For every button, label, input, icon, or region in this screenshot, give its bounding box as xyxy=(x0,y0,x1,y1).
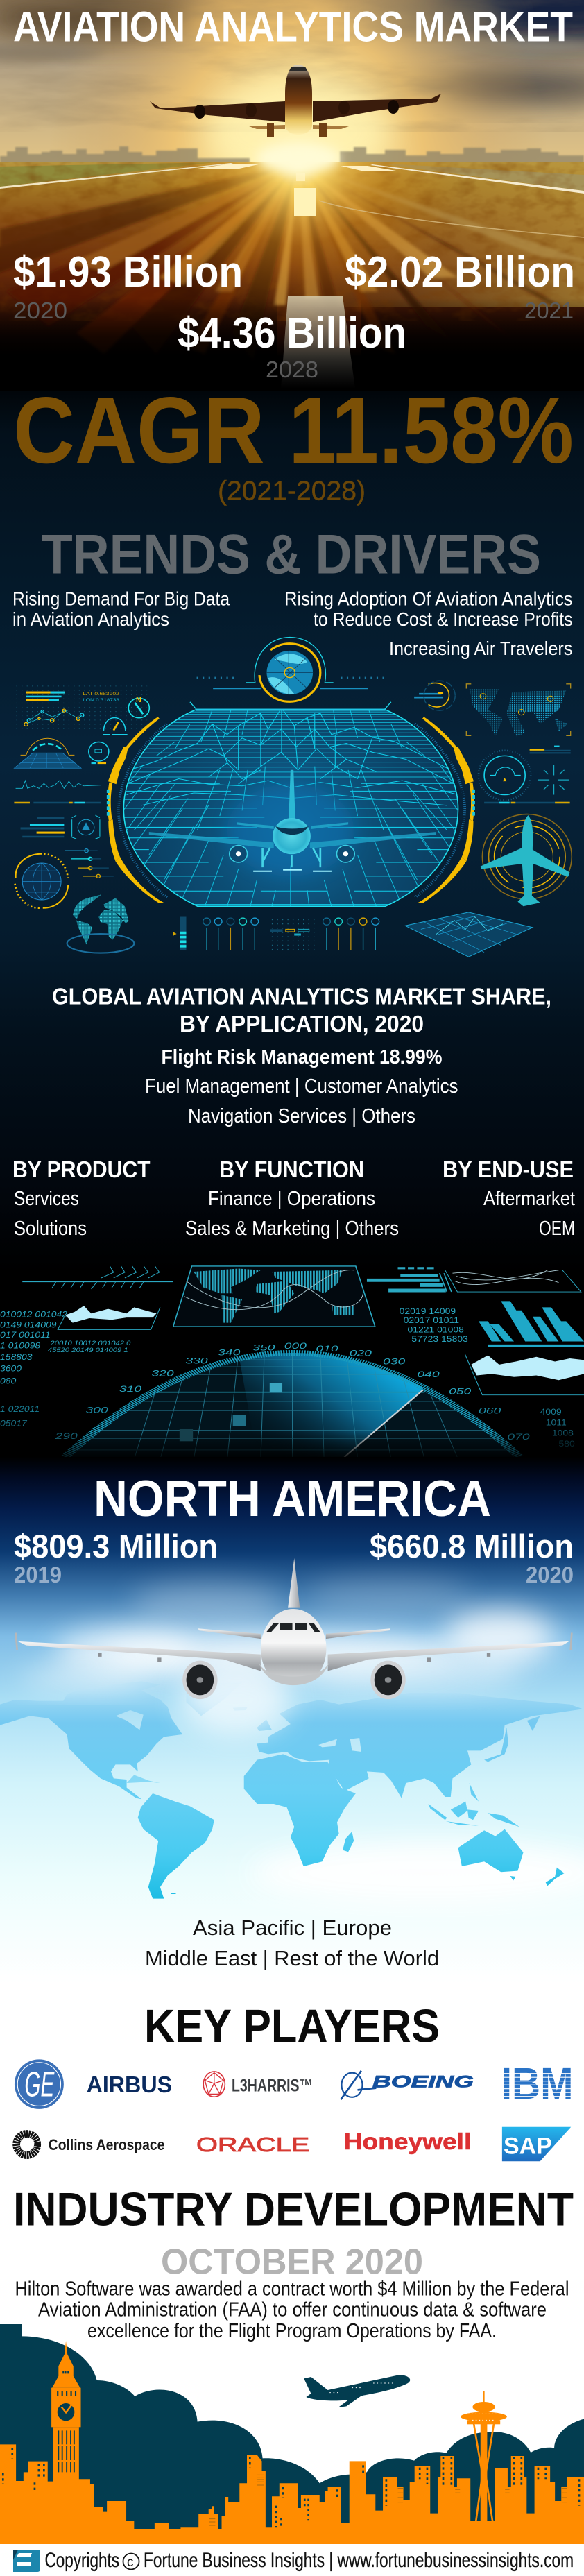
illustration: data HUD panels xyxy=(0,1266,584,1449)
reticle xyxy=(72,815,100,839)
segment column: by product: Solutions xyxy=(14,1218,87,1240)
segment column: by product: BY PRODUCT xyxy=(12,1157,150,1182)
data codes right: 57723 15803 xyxy=(411,1334,468,1344)
heading: north america: NORTH AMERICA xyxy=(94,1471,491,1527)
airplane silhouette xyxy=(304,2375,410,2407)
radar dome xyxy=(55,1343,574,1457)
data codes right: 1008 xyxy=(552,1428,574,1438)
logo: IBM: IBM xyxy=(501,2059,573,2108)
gauges xyxy=(89,718,128,763)
bearing labels xyxy=(54,1342,530,1442)
compass: N xyxy=(136,697,141,704)
sliders xyxy=(65,849,114,878)
data codes left: 010012 001042 xyxy=(0,1310,67,1319)
left readouts: LAT 0.683902 xyxy=(83,692,120,697)
world map xyxy=(0,1681,583,1899)
radar circle xyxy=(197,637,384,701)
driver: cost reduction xyxy=(284,588,573,630)
data codes left xyxy=(0,1310,131,1428)
bearing labels: 320 xyxy=(152,1369,174,1378)
compass xyxy=(128,697,149,718)
data codes left: 158803 xyxy=(0,1352,33,1361)
right bars xyxy=(367,1267,452,1292)
bearing labels: 340 xyxy=(218,1348,240,1357)
footer band xyxy=(0,2544,584,2576)
logo: SAP: SAP xyxy=(504,2133,552,2159)
stat: 2020 regional value: $660.8 Million xyxy=(370,1528,574,1564)
data codes left: 0149 014009 xyxy=(0,1320,56,1329)
stat: 2020 regional value: 2020 xyxy=(526,1562,574,1587)
data codes right: 02017 01011 xyxy=(404,1315,459,1325)
footer copyright: c xyxy=(127,2555,133,2570)
other regions xyxy=(145,1916,439,1970)
data codes left: 05017 xyxy=(0,1418,28,1428)
stat: 2019 regional value xyxy=(14,1528,218,1587)
icon: airliner front view xyxy=(16,1558,572,1699)
stat: 2019 regional value: 2019 xyxy=(14,1562,62,1587)
bearing labels: 020 xyxy=(350,1349,372,1358)
leading segment: flight risk management: Flight Risk Management 18.99% xyxy=(161,1046,443,1068)
bearing labels: 330 xyxy=(185,1356,208,1366)
segment column: by end-use: OEM xyxy=(539,1218,575,1240)
skyline xyxy=(0,146,584,167)
logo: GE xyxy=(15,2059,64,2109)
icon: Fortune Business Insights logo xyxy=(13,2550,40,2572)
bearing labels: 060 xyxy=(479,1406,501,1415)
stat: 2028 market value: 2028 xyxy=(266,357,318,382)
heading: market share by application: GLOBAL AVIATION ANALYTICS MARKET SHARE, xyxy=(52,984,551,1009)
application segments: Navigation Services | Others xyxy=(188,1105,415,1127)
dot matrix xyxy=(270,919,315,952)
logo: Boeing xyxy=(341,2071,474,2099)
panel: runway sunset photo xyxy=(0,0,584,391)
data codes left: 080 xyxy=(0,1376,17,1385)
left readouts: LON 0.318738 xyxy=(83,698,119,703)
logo: Oracle: ORACLE xyxy=(196,2133,309,2156)
space needle xyxy=(461,2391,507,2528)
footer copyright: Copyrights xyxy=(44,2549,119,2572)
heading: key players: KEY PLAYERS xyxy=(144,1999,440,2052)
world map panel xyxy=(173,1266,375,1327)
data codes left: 017 001011 xyxy=(0,1330,51,1340)
right small gauge xyxy=(414,681,455,710)
top-view aircraft with rings xyxy=(481,814,572,906)
waveform xyxy=(16,781,101,788)
aircraft in HUD xyxy=(149,770,436,876)
perspective grid tile xyxy=(14,738,81,768)
application segments xyxy=(145,1075,458,1127)
panel: dark navy background xyxy=(0,368,584,1471)
right attitude gauge xyxy=(479,747,571,800)
panel: blue sky with clouds and world map xyxy=(0,1457,584,1984)
bearing labels: 310 xyxy=(119,1385,141,1394)
illustration: flight HUD xyxy=(13,637,572,957)
cloud silhouette xyxy=(0,2324,584,2539)
data codes right: 01221 01008 xyxy=(407,1325,464,1334)
stat: 2020 market value xyxy=(13,248,243,323)
date: october 2020: OCTOBER 2020 xyxy=(161,2242,423,2283)
icon: airplane taking off xyxy=(150,65,441,137)
data codes right: 580 xyxy=(559,1439,575,1449)
segment column: by function: Finance | Operations xyxy=(208,1188,375,1210)
logo: GE: GE xyxy=(24,2065,55,2104)
heading: trends and drivers: TRENDS & DRIVERS xyxy=(42,523,541,586)
hologram earth xyxy=(67,894,134,953)
heading: market share by application xyxy=(52,984,551,1037)
data codes right: 02019 14009 xyxy=(400,1306,456,1316)
yellow frame arcs xyxy=(108,717,474,903)
data codes left: 1 022011 xyxy=(0,1404,40,1413)
right dotted world map xyxy=(466,684,571,736)
bearing labels: 050 xyxy=(449,1387,471,1396)
status bars xyxy=(14,802,570,803)
logo: L3Harris xyxy=(203,2072,313,2097)
application segments: Fuel Management | Customer Analytics xyxy=(145,1075,458,1098)
data codes right xyxy=(400,1306,575,1449)
segment column: by product: Services xyxy=(14,1188,79,1210)
CAGR heading: (2021-2028) xyxy=(218,476,366,506)
segment column: by function: BY FUNCTION xyxy=(219,1157,364,1182)
bar chart xyxy=(479,1301,584,1347)
stat: 2028 market value xyxy=(178,309,406,382)
stat: 2021 market value xyxy=(345,248,575,323)
data codes right: 1011 xyxy=(546,1418,567,1427)
logo: L3Harris: L3HARRIS™ xyxy=(232,2076,313,2096)
bearing labels: 300 xyxy=(86,1406,108,1415)
segment column: by function xyxy=(185,1157,399,1240)
segment column: by product xyxy=(12,1157,150,1240)
industry development text xyxy=(15,2278,569,2342)
bearing labels: 030 xyxy=(383,1357,405,1367)
stat: 2021 market value: 2021 xyxy=(524,298,574,323)
left readouts xyxy=(13,684,147,731)
other regions: Asia Pacific | Europe xyxy=(193,1916,392,1940)
horizontal level bars xyxy=(21,817,65,837)
other regions: Middle East | Rest of the World xyxy=(145,1946,439,1970)
logo: Collins Aerospace: Collins Aerospace xyxy=(49,2136,164,2153)
waveform chart right xyxy=(465,1354,584,1395)
buildings xyxy=(0,2444,584,2544)
logo: Honeywell: Honeywell xyxy=(344,2129,471,2155)
logo: SAP xyxy=(502,2127,571,2161)
heading scale xyxy=(22,1266,173,1289)
data codes left: 1 010098 xyxy=(0,1341,41,1350)
radar blips xyxy=(180,1383,282,1441)
data codes left: 45520 20149 014009 1 xyxy=(48,1347,128,1354)
logo: Airbus: AIRBUS xyxy=(87,2072,172,2097)
segment column: by function: Sales & Marketing | Others xyxy=(185,1218,399,1240)
dome wireframe display xyxy=(112,702,470,907)
logos: key players xyxy=(15,2059,576,2161)
bearing labels: 070 xyxy=(507,1433,530,1442)
bearing labels: 290 xyxy=(54,1432,78,1441)
panel: white lower background xyxy=(0,1984,584,2576)
wire globe xyxy=(15,854,68,908)
driver: big data: in Aviation Analytics xyxy=(12,608,169,630)
bearing labels: 010 xyxy=(316,1345,338,1354)
clock tower xyxy=(51,2341,81,2482)
mountain mesh tile xyxy=(405,912,533,957)
heading: market share by application: BY APPLICATION, 2020 xyxy=(180,1011,424,1037)
logo: Boeing: BOEING xyxy=(372,2072,474,2092)
stat: 2020 market value: 2020 xyxy=(13,298,67,323)
bottom level meter xyxy=(173,917,186,950)
dial rows xyxy=(203,918,379,950)
bearing labels: 040 xyxy=(417,1370,440,1379)
stat: 2020 market value: $1.93 Billion xyxy=(13,248,243,296)
waveform chart xyxy=(58,1306,160,1329)
data codes right: 4009 xyxy=(540,1407,562,1417)
stat: 2020 regional value xyxy=(370,1528,574,1587)
illustration: city skyline with clouds and plane xyxy=(0,2324,584,2544)
data codes left: 3600 xyxy=(0,1364,22,1373)
logo: Collins Aerospace xyxy=(17,2134,164,2155)
segment column: by end-use xyxy=(443,1157,575,1240)
bearing labels: 000 xyxy=(284,1342,307,1351)
stat: 2019 regional value: $809.3 Million xyxy=(14,1528,218,1564)
driver: big data xyxy=(12,588,230,630)
driver: big data: Rising Demand For Big Data xyxy=(12,588,230,609)
data codes left: 20010 10012 001042 0 xyxy=(49,1340,131,1347)
sine wave chart xyxy=(445,1270,581,1292)
bearing labels: 350 xyxy=(252,1343,275,1353)
stat: 2028 market value: $4.36 Billion xyxy=(178,309,406,357)
segment column: by end-use: BY END-USE xyxy=(443,1157,574,1182)
industry development text: excellence for the Flight Program Operations by FAA. xyxy=(87,2320,497,2342)
